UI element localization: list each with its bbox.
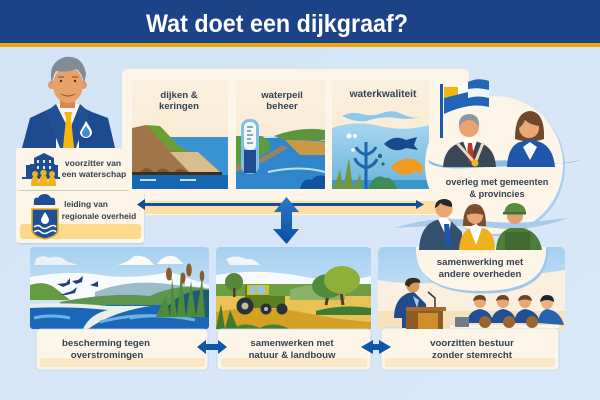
icon: wapenschild [32,194,58,239]
icon: bomen [225,266,371,315]
figure: dijkgraaf [22,57,115,148]
card: dijken en keringen: keringen [159,101,199,112]
card: waterpeilbeheer [236,80,325,189]
panel: samenwerking met andere overheden: samenwerking met [437,257,524,268]
icon: waterplanten [333,142,397,189]
arrow: dubbele pijl links [197,340,227,354]
arrow: verticale dubbele pijl [273,197,299,244]
header banner [0,0,600,47]
icon: waterdruppel speld [80,121,92,138]
figure: bestuurder [459,204,495,250]
figure: militair [496,203,542,250]
card: dijken en keringen [132,80,228,189]
icon: peilschaal [241,119,259,174]
figure: bestuursleden [450,295,564,328]
panel: bescherming tegen overstromingen: bescherming tegen [62,338,150,349]
panel: taken [122,69,469,215]
arrow: dubbele pijl rechts [361,340,391,354]
icon: riet [156,264,209,317]
title: Wat doet een dijkgraaf? [146,10,408,38]
panel: bescherming tegen overstromingen: overstromingen [71,350,143,361]
card: waterkwaliteit: waterkwaliteit [349,89,417,100]
panel: overleg met gemeenten en provincies: & provincies [469,189,525,199]
arrow: horizontale dubbele pijl [137,199,424,210]
text: leiding van regionale overheid: leiding van [64,199,108,209]
figure: burgemeester [443,114,496,167]
panel: samenwerken met natuur en landbouw: natuur & landbouw [249,350,336,361]
figure: gedeputeerde [507,111,555,167]
figure: spreker achter katheder [394,278,446,329]
panel: functies dijkgraaf: regionale overheid [62,211,136,221]
panel: samenwerken met natuur en landbouw: samenwerken met [250,338,334,349]
icon: vlag [440,79,489,138]
card: dijken en keringen: dijken & [160,90,198,101]
card: waterpeilbeheer: waterpeil [260,90,303,101]
icon: waterschap [22,153,60,186]
panel: voorzitten bestuur zonder stemrecht [378,247,565,370]
panel: bescherming tegen overstromingen [30,247,209,370]
icon: oranje vis [391,159,423,175]
icon: tractor [236,285,288,314]
panel: functies dijkgraaf [16,148,144,244]
panel: samenwerking met andere overheden [395,199,568,294]
icon: vogels [57,276,98,295]
panel: functies dijkgraaf: een waterschap [62,169,126,179]
text: voorzitter van een waterschap: voorzitter van [65,158,121,168]
panel: voorzitten bestuur zonder stemrecht: voorzitten bestuur [430,338,514,349]
panel: samenwerking met andere overheden: andere overheden [439,269,521,280]
icon: blauwe vis [384,137,418,150]
panel: samenwerken met natuur en landbouw [216,247,371,370]
card: waterpeilbeheer: beheer [266,101,298,112]
panel: overleg met gemeenten en provincies [425,79,580,236]
figure: ambtenaar [419,199,462,250]
card: waterkwaliteit [332,80,429,189]
panel: overleg met gemeenten en provincies: overleg met gemeenten [446,177,549,187]
panel: voorzitten bestuur zonder stemrecht: zonder stemrecht [432,350,513,361]
